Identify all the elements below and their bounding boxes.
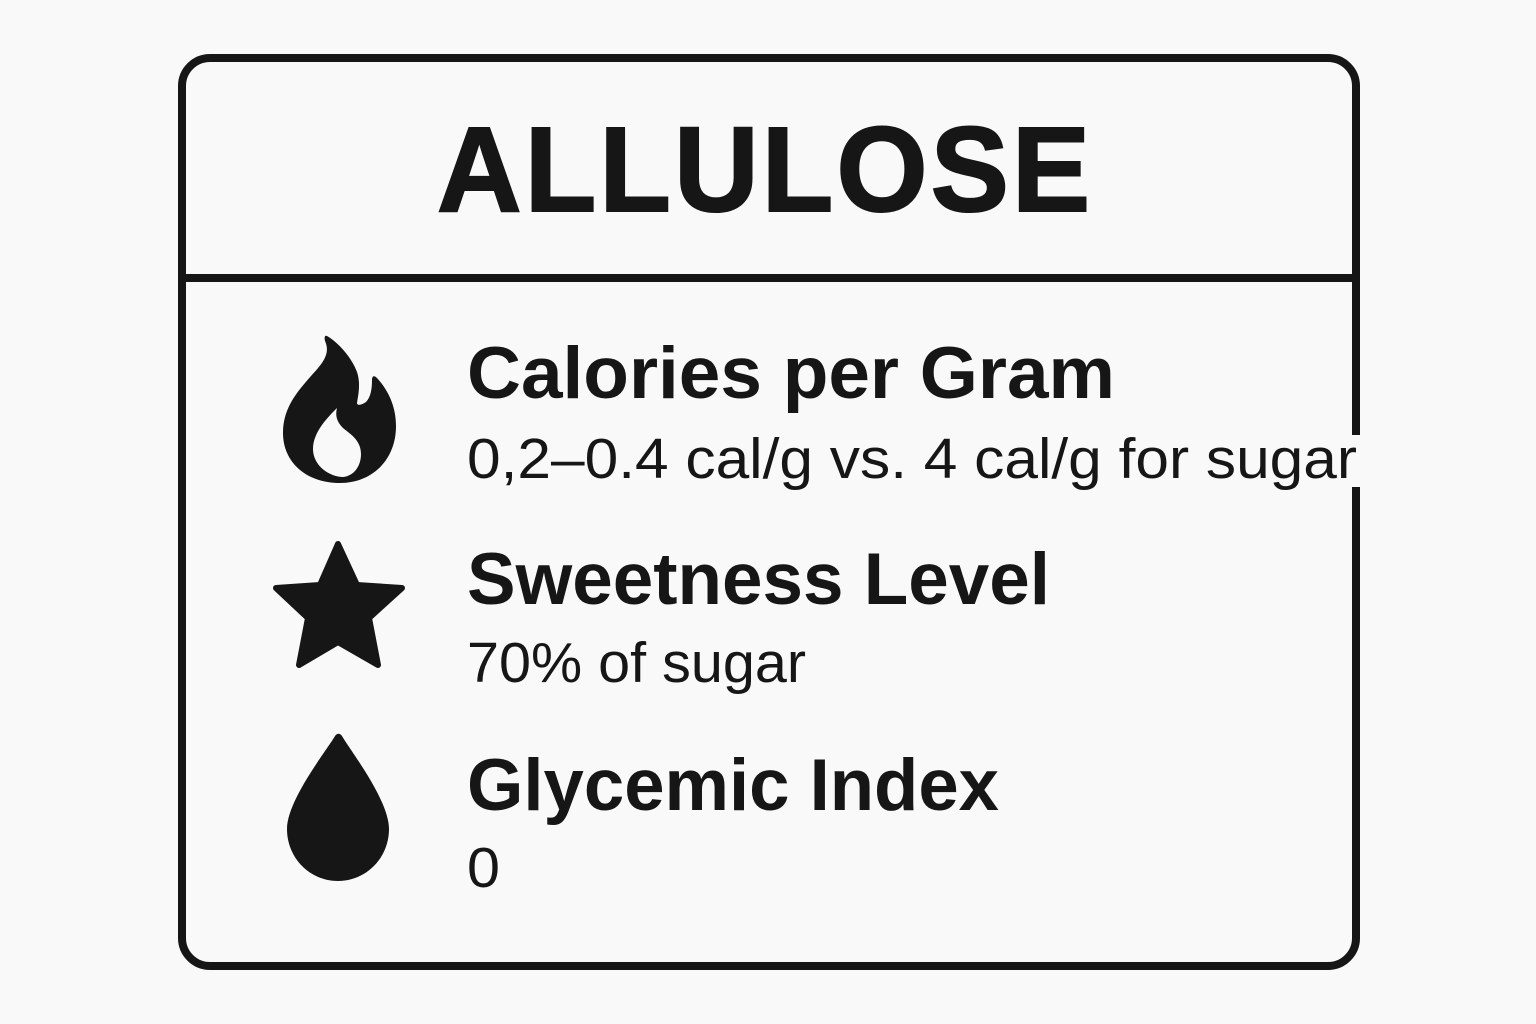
text: glycemic value: 0 xyxy=(467,837,500,899)
heading: glycemic index: Glycemic Index xyxy=(467,744,999,826)
panel: allulose card frame xyxy=(182,58,1356,966)
heading: sweetness level: Sweetness Level xyxy=(467,538,1050,620)
title: ALLULOSE xyxy=(437,102,1090,237)
text: calories value: 0,2–0.4 cal/g vs. 4 cal/g for sugar xyxy=(467,428,1357,490)
icon: flame xyxy=(283,336,396,483)
text: sweetness value: 70% of sugar xyxy=(467,632,806,694)
icon: water drop xyxy=(287,734,389,881)
icon: star xyxy=(276,544,402,665)
heading: calories per gram: Calories per Gram xyxy=(467,332,1115,414)
